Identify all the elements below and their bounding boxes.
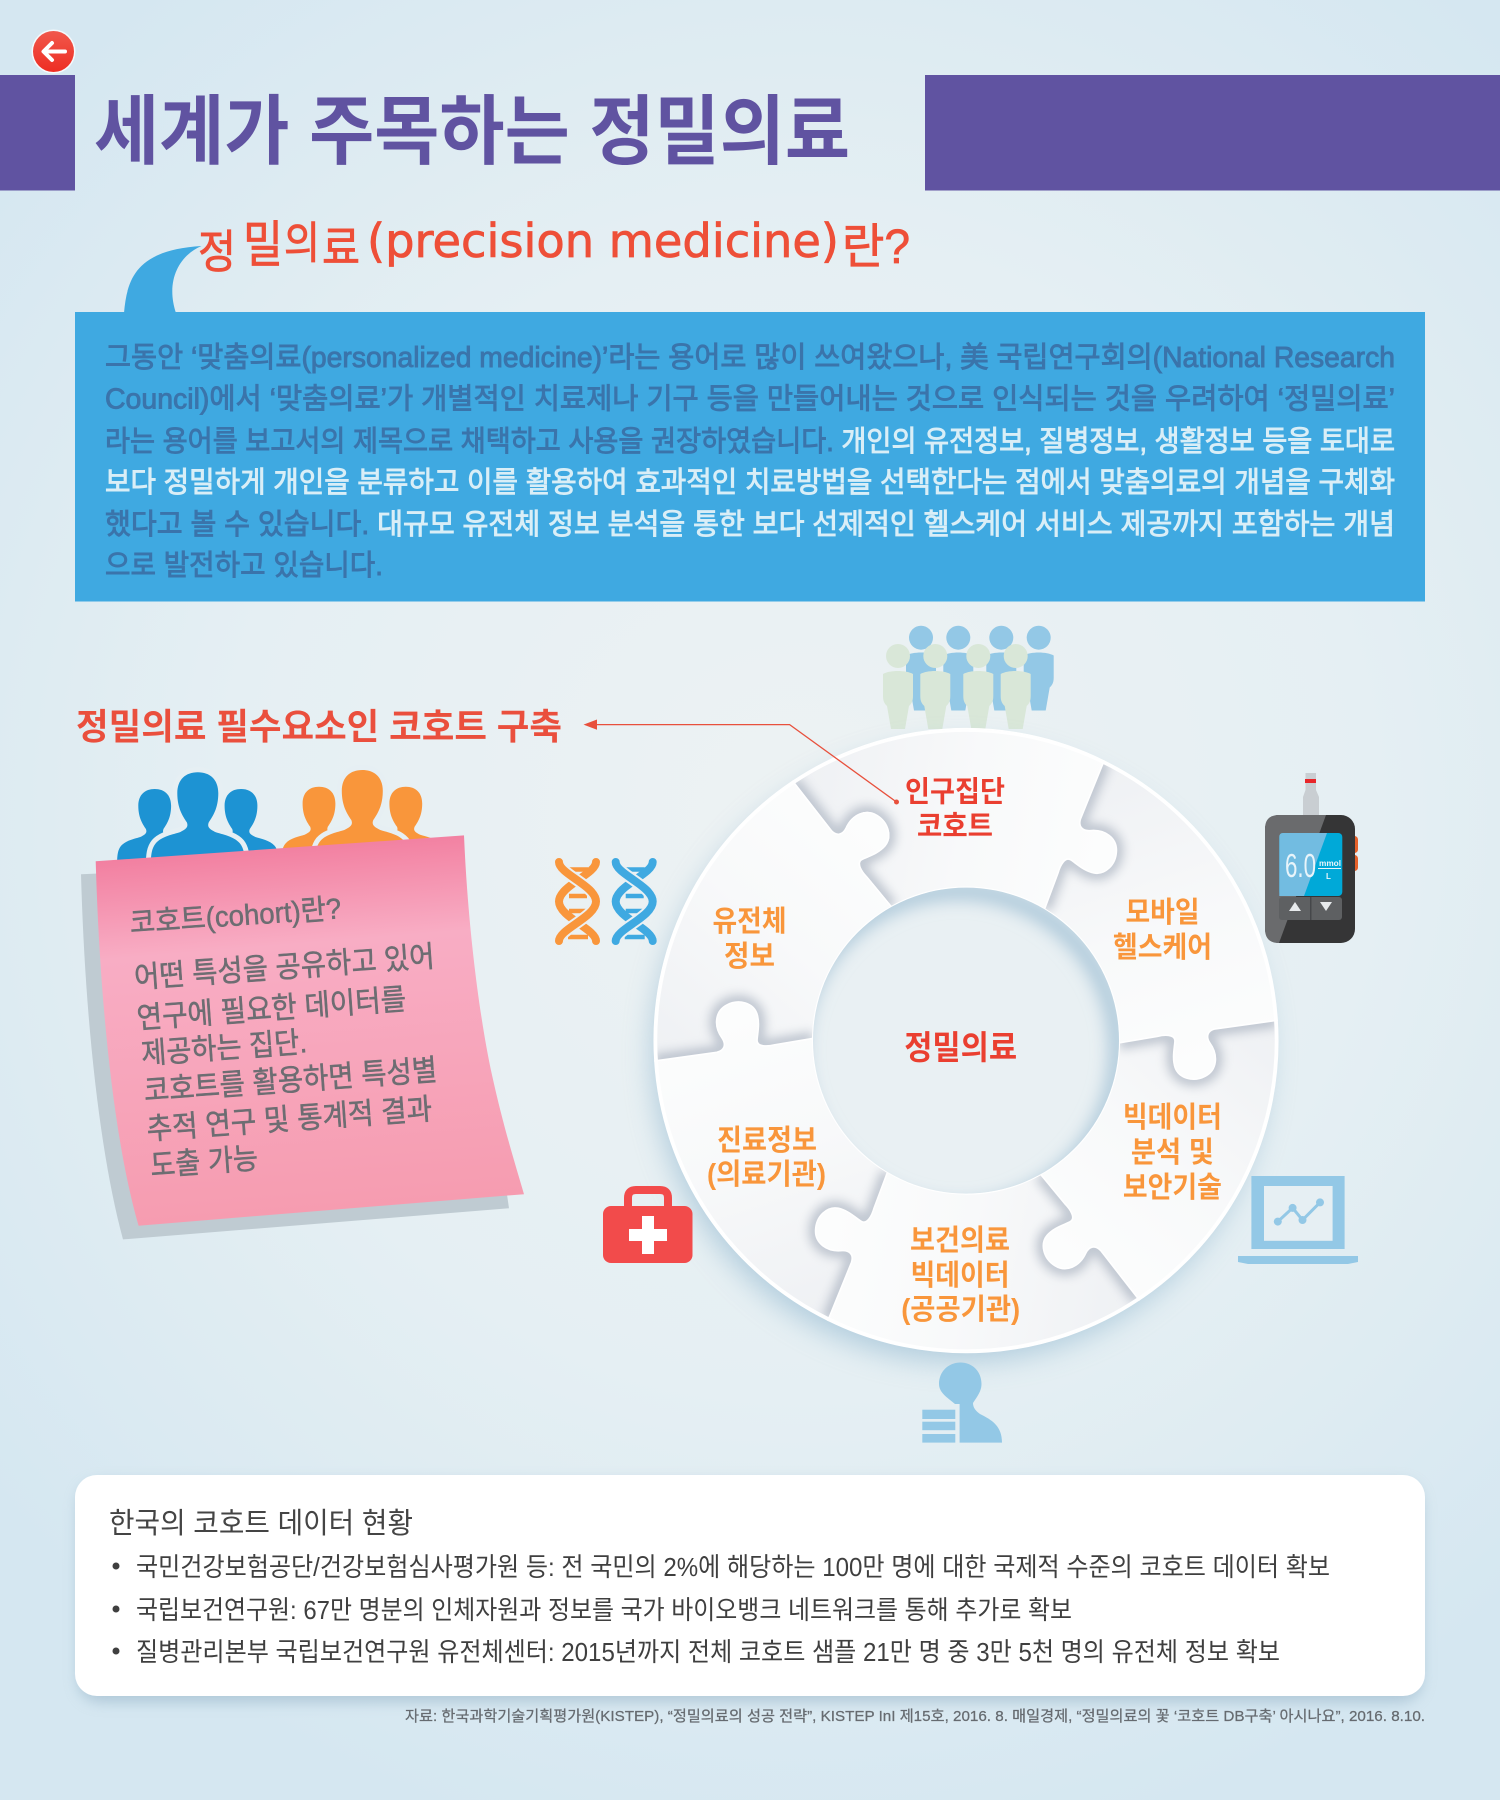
ring shadow [652, 746, 1268, 1362]
sticky note text [129, 893, 438, 1183]
handwritten heading [198, 214, 910, 278]
label: cohort: 코호트 [917, 811, 993, 843]
icon: dna helix blue [616, 862, 653, 941]
definition text: 보다 정밀하게 개인을 분류하고 이를 활용하여 효과적인 치료방법을 선택한다는 점에서 맞춤의료의 개념을 구체화 [105, 466, 1395, 499]
label: clinical [707, 1124, 826, 1191]
piece: population cohort [793, 729, 1117, 909]
label: public data: 보건의료 [910, 1224, 1010, 1257]
label: big data: 분석 및 [1131, 1136, 1214, 1169]
definition text: 으로 발전하고 있습니다. [105, 549, 383, 582]
handwritten heading: 밀 [243, 217, 283, 273]
icon: orange people [281, 770, 443, 864]
icon: glucose meter: 6.0 [1285, 847, 1316, 884]
card shadow [78, 1482, 1422, 1702]
icon: glucose meter [1265, 773, 1358, 943]
label: big data [1123, 1101, 1222, 1204]
puzzle ring [654, 728, 1278, 1354]
icon: crowd [883, 626, 1054, 729]
source note: 자료: 한국과학기술기획평가원(KISTEP), “정밀의료의 성공 전략”, KISTEP InI 제15호, 2016. 8. 매일경제, “정밀의료의 꽃 ‘코호트 DB구축’ 아시나요”, 2016. 8.10. [405, 1708, 1425, 1725]
label: center: 정밀의료 [904, 1029, 1017, 1066]
label: public data: (공공기관) [901, 1293, 1020, 1326]
icon: person with list [922, 1362, 1002, 1443]
label: cohort: 인구집단 [905, 776, 1005, 808]
icon: glucose meter: L [1326, 872, 1331, 881]
handwritten heading: (precision medicine) [367, 214, 839, 268]
icon: dna helix orange [559, 862, 596, 941]
label: genome: 정보 [724, 941, 775, 973]
handwritten heading: 료 [322, 222, 360, 274]
label: public data: 빅데이터 [910, 1259, 1010, 1292]
ring rim [656, 731, 1276, 1351]
bullet list [112, 1552, 1330, 1667]
title band [0, 75, 1500, 190]
callout tail [124, 246, 202, 313]
definition text: 그동안 ‘맞춤의료(personalized medicine)’라는 용어로 많이 쓰여왔으나, 美 국립연구회의(National Research [105, 341, 1395, 374]
cohort heading: 정밀의료 필수요소인 코호트 구축 [76, 706, 562, 747]
title: 세계가 주목하는 정밀의료 [94, 90, 850, 175]
sticky note text: 제공하는 집단. [140, 1026, 308, 1071]
sticky note text: 코호트를 활용하면 특성별 [143, 1054, 438, 1108]
handwritten heading: 의 [284, 219, 320, 268]
sticky note [81, 835, 524, 1239]
label: mobile: 모바일 [1126, 896, 1200, 929]
definition text: Council)에서 ‘맞춤의료’가 개별적인 치료제나 기구 등을 만들어내는 것으로 인식되는 것을 우려하여 ‘정밀의료’ [105, 382, 1395, 416]
definition text: 했다고 볼 수 있습니다. 대규모 유전체 정보 분석을 통한 보다 선제적인 헬스케어 서비스 제공까지 포함하는 개념 [105, 508, 1395, 541]
label: public data [901, 1224, 1020, 1326]
sticky note text: 코호트(cohort)란? [129, 893, 342, 940]
definition text [105, 341, 1395, 582]
ring labels [707, 776, 1222, 1326]
definition text: 라는 용어를 보고서의 제목으로 채택하고 사용을 권장하였습니다. 개인의 유전정보, 질병정보, 생활정보 등을 토대로 [105, 425, 1395, 458]
bullet list: 국립보건연구원: 67만 명분의 인체자원과 정보를 국가 바이오뱅크 네트워크를 통해 추가로 확보 [136, 1595, 1072, 1625]
panel heading: 한국의 코호트 데이터 현황 [109, 1507, 413, 1540]
sticky note text: 연구에 필요한 데이터를 [136, 983, 407, 1035]
arrow: cohort link [584, 720, 899, 804]
piece: genome data [654, 781, 891, 1062]
label: mobile: 헬스케어 [1113, 931, 1212, 964]
label: genome [712, 905, 786, 973]
icon: first aid kit [603, 1190, 692, 1263]
label: mobile [1113, 896, 1212, 964]
bullet list: 질병관리본부 국립보건연구원 유전체센터: 2015년까지 전체 코호트 샘플 21만 명 중 3만 5천 명의 유전체 정보 확보 [136, 1637, 1280, 1667]
handwritten heading: 정 [198, 226, 236, 278]
panel: definition [75, 312, 1425, 602]
label: genome: 유전체 [712, 905, 786, 938]
piece: clinical data [654, 1002, 887, 1322]
piece: public health data [815, 1172, 1139, 1353]
center disc [813, 888, 1119, 1194]
bullet list: 국민건강보험공단/건강보험심사평가원 등: 전 국민의 2%에 해당하는 100만 명에 대한 국제적 수준의 코호트 데이터 확보 [136, 1552, 1330, 1582]
handwritten heading: 란? [842, 221, 910, 274]
sticky note text: 어떤 특성을 공유하고 있어 [133, 941, 436, 995]
piece: mobile healthcare [1045, 760, 1278, 1078]
label: big data: 보안기술 [1123, 1171, 1222, 1204]
label: cohort [905, 776, 1005, 843]
back button icon [32, 30, 76, 74]
sticky note text: 도출 가능 [149, 1142, 259, 1183]
label: clinical: 진료정보 [717, 1124, 817, 1157]
label: clinical: (의료기관) [707, 1158, 826, 1191]
icon: glucose meter: mmol [1319, 859, 1341, 868]
icon: laptop chart [1238, 1176, 1358, 1264]
icon: blue people [117, 772, 279, 866]
label: big data: 빅데이터 [1123, 1101, 1222, 1134]
panel: Korea cohort data [75, 1475, 1425, 1696]
sticky note text: 추적 연구 및 통계적 결과 [146, 1093, 433, 1146]
piece: big data analysis [1041, 1021, 1278, 1301]
